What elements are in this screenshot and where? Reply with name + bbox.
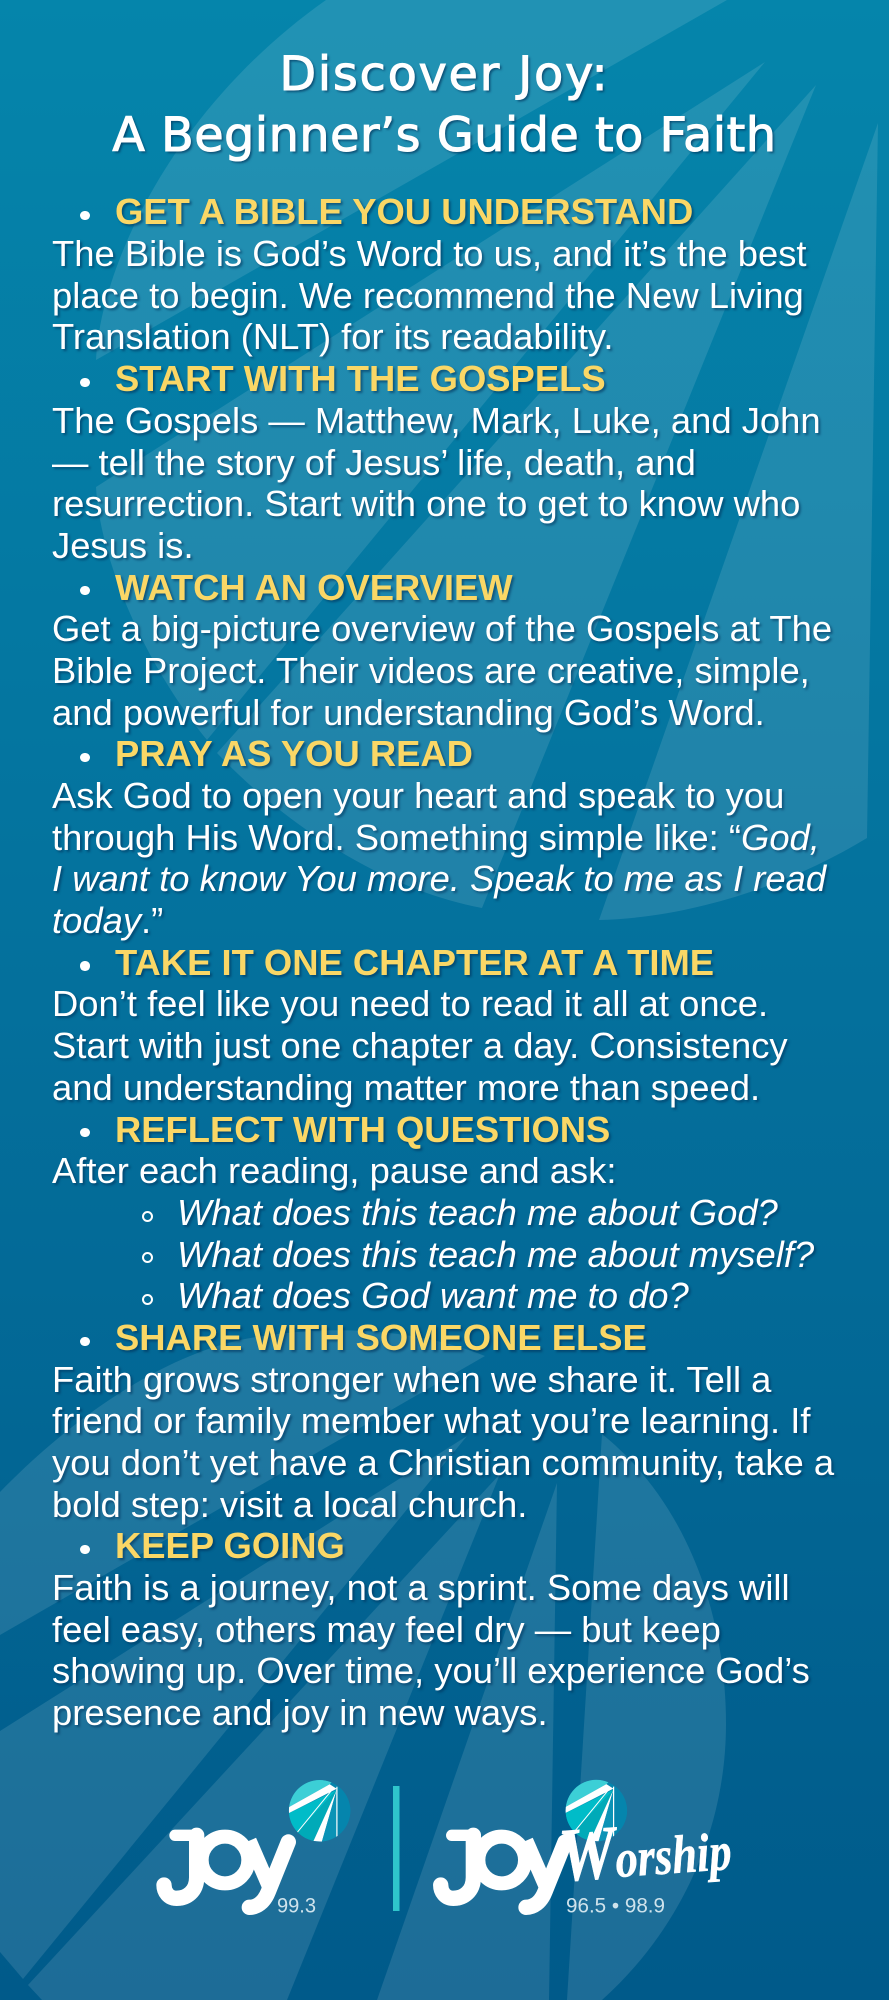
- step 6: What does God want me to do?: [177, 1275, 689, 1316]
- title line 1: Discover Joy:: [279, 46, 610, 102]
- logo: Joy 99.3: [164, 1780, 350, 1918]
- icon: sunburst disc: [289, 1780, 350, 1842]
- step 4: [52, 733, 830, 944]
- step 1: The Bible is God’s Word to us, and it’s the best: [52, 233, 807, 274]
- step 3: [52, 567, 834, 736]
- frequency 99.3: 99.3: [277, 1894, 316, 1918]
- step 6: After each reading, pause and ask:: [52, 1150, 616, 1191]
- step 8: feel easy, others may feel dry — but keep: [52, 1609, 721, 1650]
- step 6: What does this teach me about God?: [177, 1192, 778, 1233]
- step 4: through His Word. Something simple like: “God,: [52, 817, 820, 858]
- step 7: SHARE WITH SOMEONE ELSE: [115, 1317, 647, 1358]
- icon: sunburst disc: [565, 1780, 627, 1841]
- wordmark: Joy: [164, 1835, 288, 1907]
- title line 2: A Beginner’s Guide to Faith: [112, 108, 777, 162]
- step 3: WATCH AN OVERVIEW: [115, 567, 513, 608]
- station logos: [156, 1780, 730, 1915]
- step 5: and understanding matter more than speed.: [52, 1067, 760, 1108]
- step 7: [52, 1317, 836, 1528]
- step 7: Faith grows stronger when we share it. Tell a: [52, 1359, 771, 1400]
- step 4: today.”: [52, 900, 163, 941]
- step 8: presence and joy in new ways.: [52, 1692, 548, 1733]
- step 5: Start with just one chapter a day. Consistency: [52, 1025, 788, 1066]
- step 2: Jesus is.: [52, 525, 194, 566]
- step 5: TAKE IT ONE CHAPTER AT A TIME: [115, 942, 714, 983]
- step 6: What does this teach me about myself?: [177, 1234, 814, 1275]
- step 6: [52, 1109, 817, 1316]
- wordmark: Worship: Worship: [556, 1802, 734, 1898]
- step 2: START WITH THE GOSPELS: [115, 358, 606, 399]
- step 7: you don’t yet have a Christian community, take a: [52, 1442, 834, 1483]
- step 5: [52, 942, 790, 1110]
- step 4: PRAY AS YOU READ: [115, 733, 473, 774]
- step 1: GET A BIBLE YOU UNDERSTAND: [115, 191, 693, 232]
- step 3: Get a big-picture overview of the Gospels at The: [52, 608, 832, 649]
- step 4: Ask God to open your heart and speak to you: [52, 775, 784, 816]
- step 7: bold step: visit a local church.: [52, 1484, 527, 1525]
- divider: [393, 1786, 400, 1911]
- wordmark: Joy: [441, 1835, 565, 1907]
- step 2: — tell the story of Jesus’ life, death, and: [52, 442, 696, 483]
- step 3: Bible Project. Their videos are creative, simple,: [52, 650, 810, 691]
- step 8: showing up. Over time, you’ll experience God’s: [52, 1650, 810, 1691]
- step 7: friend or family member what you’re learning. If: [52, 1400, 810, 1441]
- step 6: REFLECT WITH QUESTIONS: [115, 1109, 610, 1150]
- logo: Joy Worship 96.5 98.9: [441, 1780, 734, 1918]
- step 1: [52, 191, 809, 360]
- step 4: I want to know You more. Speak to me as I read: [52, 858, 826, 899]
- step 5: Don’t feel like you need to read it all at once.: [52, 983, 768, 1024]
- step 1: Translation (NLT) for its readability.: [52, 316, 614, 357]
- step 2: The Gospels — Matthew, Mark, Luke, and John: [52, 400, 821, 441]
- step 3: and powerful for understanding God’s Word.: [52, 692, 765, 733]
- step 2: [52, 358, 822, 566]
- frequencies 96.5 98.9: 96.5 • 98.9: [566, 1894, 665, 1918]
- step 8: [52, 1525, 811, 1736]
- step 8: Faith is a journey, not a sprint. Some days will: [52, 1567, 790, 1608]
- step 2: resurrection. Start with one to get to know who: [52, 483, 800, 524]
- step 1: place to begin. We recommend the New Living: [52, 275, 804, 316]
- step 8: KEEP GOING: [115, 1525, 345, 1566]
- guide steps: [52, 191, 836, 1736]
